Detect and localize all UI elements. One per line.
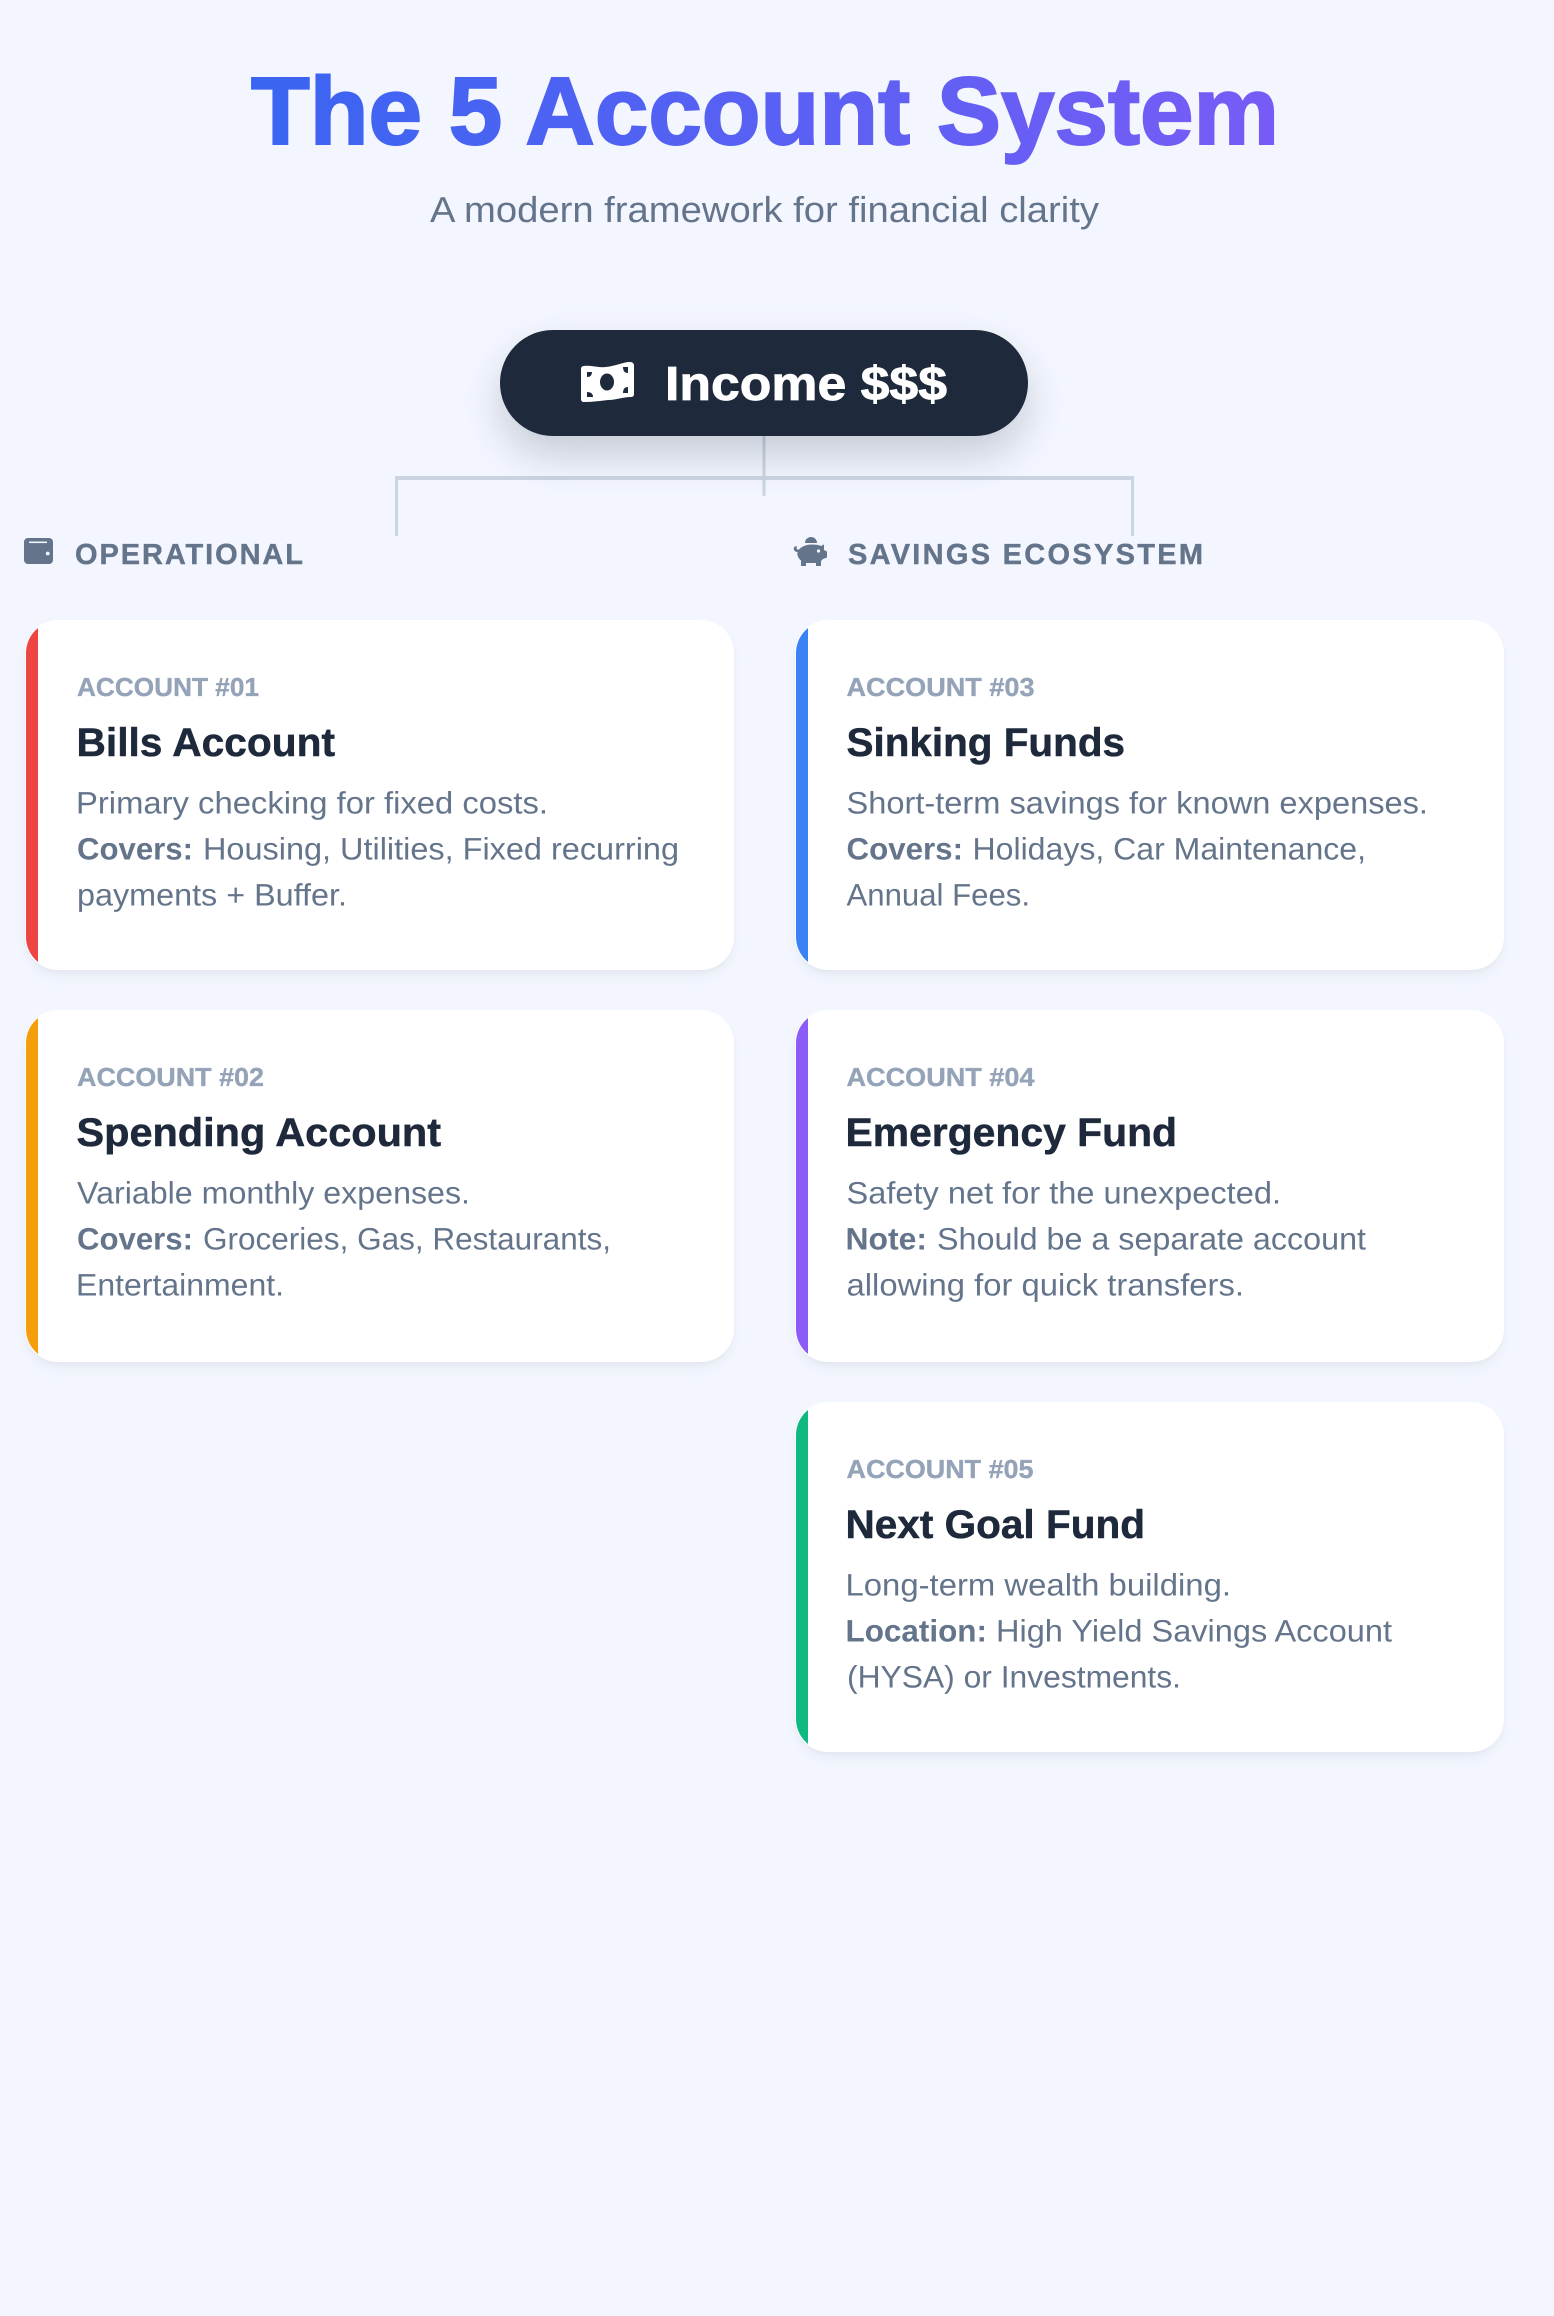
accent bar: blue xyxy=(796,628,808,962)
text: bills account: Primary checking for fixed costs. xyxy=(76,786,548,820)
panel: account 04 emergency fund xyxy=(796,1011,1503,1361)
text: sinking funds: ACCOUNT #03 xyxy=(846,672,1034,702)
icon: piggy bank xyxy=(794,537,827,566)
title: The 5 Account System xyxy=(251,58,1279,165)
text: spending account: Groceries, Gas, Restaurants, xyxy=(203,1222,611,1256)
icon: wallet xyxy=(24,538,53,564)
icon: money bill xyxy=(581,362,634,402)
text: bills account: Housing, Utilities, Fixed recurring xyxy=(203,832,679,866)
text: sinking funds: Short-term savings for known expenses. xyxy=(846,786,1428,820)
text: sinking funds: Holidays, Car Maintenance, xyxy=(972,832,1366,866)
text: emergency fund: Safety net for the unexpected. xyxy=(846,1176,1281,1210)
text: next goal fund: Next Goal Fund xyxy=(846,1503,1145,1547)
text: spending account xyxy=(76,1062,611,1302)
savings label: SAVINGS ECOSYSTEM xyxy=(848,539,1203,571)
accent bar: green xyxy=(796,1410,808,1744)
text: spending account: Entertainment. xyxy=(76,1268,284,1302)
text: bills account: ACCOUNT #01 xyxy=(77,672,259,702)
panel: account 05 next goal fund xyxy=(796,1403,1503,1751)
subtitle: A modern framework for financial clarity xyxy=(430,189,1099,230)
text: emergency fund: allowing for quick transfers. xyxy=(846,1268,1244,1302)
income pill xyxy=(500,330,1028,436)
panel: account 02 spending xyxy=(26,1011,733,1361)
income label: Income $$$ xyxy=(665,358,947,411)
connector lines xyxy=(395,436,1134,536)
operational label: OPERATIONAL xyxy=(75,539,303,571)
text: bills account: Covers: xyxy=(77,832,193,866)
text: next goal fund: Location: xyxy=(846,1614,987,1648)
text: bills account: Bills Account xyxy=(76,721,335,765)
text: next goal fund: High Yield Savings Account xyxy=(996,1614,1392,1648)
accent bar: purple xyxy=(796,1018,808,1354)
accent bar: red xyxy=(26,628,38,962)
text: spending account: Variable monthly expenses. xyxy=(77,1176,470,1210)
text: next goal fund: (HYSA) or Investments. xyxy=(847,1660,1181,1694)
text: emergency fund: Should be a separate account xyxy=(937,1222,1366,1256)
text: spending account: ACCOUNT #02 xyxy=(77,1062,264,1092)
text: next goal fund xyxy=(846,1454,1392,1694)
panel: account 01 bills xyxy=(26,621,733,969)
text: sinking funds: Annual Fees. xyxy=(846,878,1030,912)
text: spending account: Spending Account xyxy=(76,1111,441,1155)
accent bar: amber xyxy=(26,1018,38,1354)
text: sinking funds: Covers: xyxy=(846,832,963,866)
text: emergency fund xyxy=(846,1062,1366,1302)
text: spending account: Covers: xyxy=(77,1222,193,1256)
section heading: savings ecosystem xyxy=(794,537,1203,571)
text: emergency fund: ACCOUNT #04 xyxy=(846,1062,1035,1092)
text: emergency fund: Emergency Fund xyxy=(846,1111,1177,1155)
text: next goal fund: ACCOUNT #05 xyxy=(846,1454,1034,1484)
text: next goal fund: Long-term wealth building. xyxy=(846,1568,1231,1602)
text: sinking funds xyxy=(846,672,1428,912)
panel: account 03 sinking funds xyxy=(796,621,1503,969)
text: emergency fund: Note: xyxy=(846,1222,927,1256)
text: bills account xyxy=(76,672,679,912)
text: bills account: payments + Buffer. xyxy=(77,878,347,912)
text: sinking funds: Sinking Funds xyxy=(846,721,1125,765)
section heading: operational xyxy=(24,538,303,571)
